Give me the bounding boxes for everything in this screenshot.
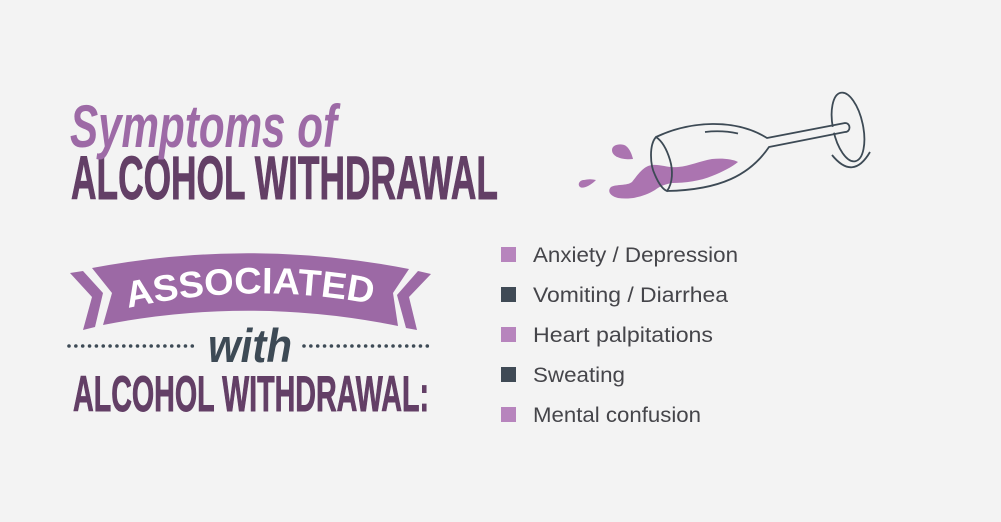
item: Heart palpitations: Heart palpitations <box>533 324 713 347</box>
dotted divider right <box>304 344 429 348</box>
item: Sweating <box>501 364 625 387</box>
subheading: Alcohol Withdrawal: ALCOHOL WITHDRAWAL: <box>73 366 429 422</box>
glass foot <box>826 90 870 164</box>
wine drop small <box>579 179 596 188</box>
glass foot shadow arc <box>832 152 870 167</box>
item: Anxiety / Depression: Anxiety / Depression <box>533 244 738 267</box>
icon: spilled wine glass <box>579 90 870 199</box>
wine drop large <box>612 144 633 159</box>
dotted divider left <box>69 344 194 348</box>
wine spill <box>609 159 738 199</box>
word: with: with <box>208 319 292 372</box>
symptom list <box>501 244 738 427</box>
item: Mental confusion: Mental confusion <box>533 404 701 427</box>
item: Sweating: Sweating <box>533 364 625 387</box>
glass stem and bowl <box>656 123 850 191</box>
ribbon left tail <box>70 271 103 330</box>
ribbon label: ASSOCIATED <box>128 268 374 308</box>
heading: Alcohol Withdrawal: ALCOHOL WITHDRAWAL <box>71 144 498 212</box>
ribbon body <box>92 253 409 326</box>
ribbon right tail <box>397 271 431 330</box>
glass rim <box>651 137 672 191</box>
item: Vomiting / Diarrhea: Vomiting / Diarrhea <box>533 284 728 307</box>
stem mask <box>770 124 847 146</box>
ribbon banner <box>70 253 431 330</box>
glass highlight <box>705 131 738 134</box>
heading: Symptoms of: Symptoms of <box>70 93 341 160</box>
